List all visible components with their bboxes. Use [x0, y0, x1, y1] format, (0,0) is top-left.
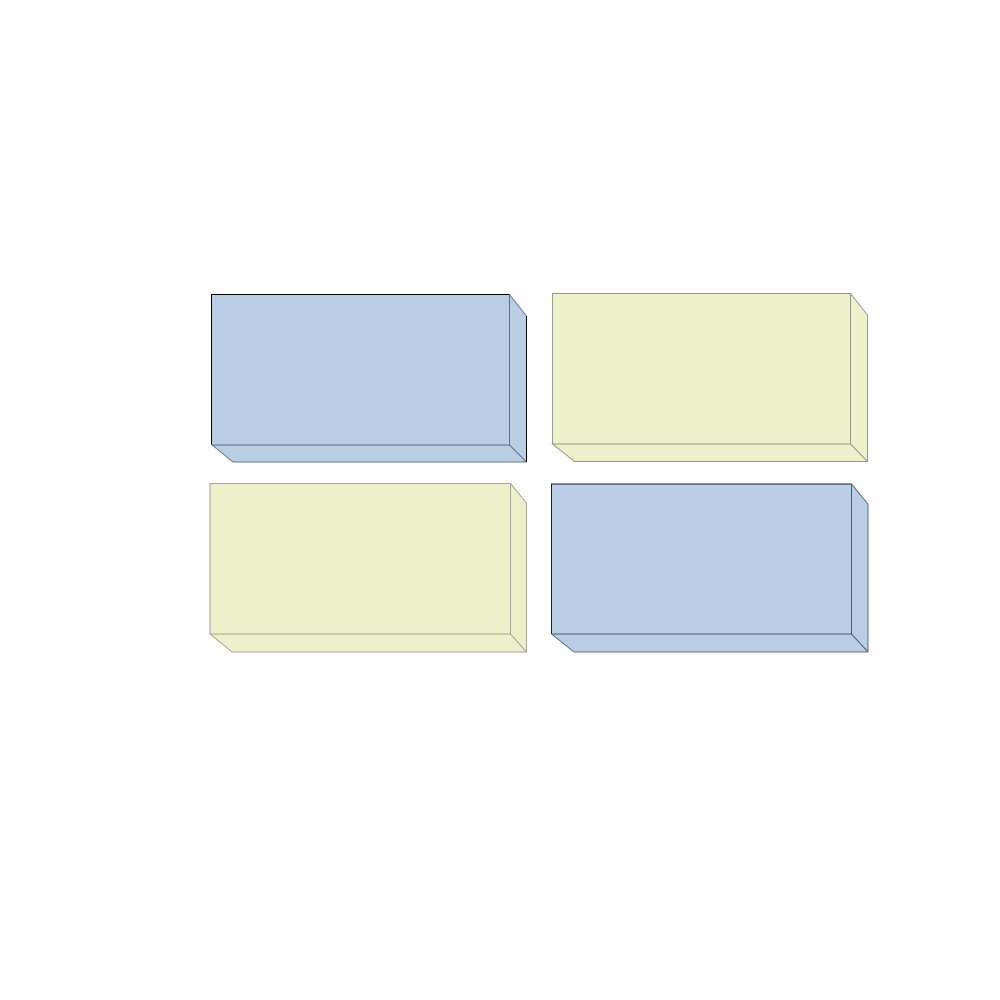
- block: yellow bottom left: [210, 484, 526, 652]
- block: yellow top right: [552, 294, 868, 462]
- block: blue top left: [212, 294, 526, 462]
- block: blue bottom right: [552, 484, 868, 652]
